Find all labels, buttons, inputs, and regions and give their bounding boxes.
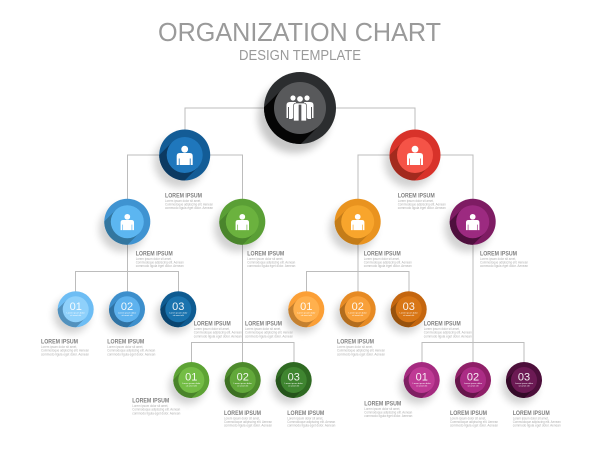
icon: person <box>407 146 423 165</box>
node: orange 03 <box>384 291 427 336</box>
text: orange 03: LOREM IPSUM <box>424 321 461 328</box>
node: purple 01: 01 <box>416 372 428 384</box>
node: orange 03: 03 <box>403 301 415 313</box>
node: green 01: 01 <box>185 372 197 384</box>
text: green lead: Commodoque adipiscing elit. Aenean <box>247 260 295 264</box>
text: light blue 01 <box>41 339 89 356</box>
text: green 01: LOREM IPSUM <box>132 398 170 405</box>
text: light blue 01: Commodoque adipiscing elit. Aenean <box>41 349 89 353</box>
text: green 02: LOREM IPSUM <box>224 410 261 417</box>
text: blue manager: Lorem ipsum dolor sit amet, <box>165 199 201 203</box>
text: orange lead: Commodoque adipiscing elit. Aenean <box>364 260 412 264</box>
text: green 03: Lorem ipsum dolor sit amet, <box>287 417 323 421</box>
text: green 03: Commodoque adipiscing elit. Aenean <box>287 420 335 424</box>
text: purple 03: Lorem ipsum dolor sit amet, <box>513 417 549 421</box>
text: orange lead: Lorem ipsum dolor sit amet, <box>364 257 400 261</box>
text: light blue 01: commodo ligula eget dolor. Aenean <box>41 352 89 356</box>
title: ORGANIZATION CHART <box>158 17 441 47</box>
connector lines <box>76 108 524 362</box>
node: purple 03: sit amet elit <box>518 385 530 388</box>
text: light blue 02: commodo ligula eget dolor. Aenean <box>107 352 155 356</box>
node: green 02: 02 <box>237 372 249 384</box>
text: purple lead: Lorem ipsum dolor sit amet, <box>480 257 516 261</box>
node: orange 01 <box>282 291 324 336</box>
node: purple lead <box>442 198 496 255</box>
text: light blue 03: commodo ligula eget dolor. Aenean <box>194 334 242 338</box>
text: green lead <box>247 250 295 268</box>
node: light blue 03: 03 <box>172 301 184 313</box>
text: light blue 02: Lorem ipsum dolor sit amet, <box>107 345 143 349</box>
text: orange lead: commodo ligula eget dolor. Aenean <box>364 264 412 268</box>
text: blue manager: commodo ligula eget dolor. Aenean <box>165 206 213 210</box>
node: green 03 <box>268 362 312 407</box>
text: red manager: commodo ligula eget dolor. Aenean <box>398 206 446 210</box>
node: orange 01: 01 <box>300 301 312 313</box>
text: light blue 01: Lorem ipsum dolor sit amet, <box>41 345 77 349</box>
icon: person <box>121 214 134 230</box>
text: green 02 <box>224 410 272 428</box>
text: purple 02: LOREM IPSUM <box>450 410 487 417</box>
text: purple 03 <box>513 410 561 428</box>
text: light blue lead: Lorem ipsum dolor sit amet, <box>136 257 172 261</box>
node: orange 02: sit amet elit <box>352 314 364 317</box>
text: light blue lead <box>136 250 184 268</box>
text: blue manager: LOREM IPSUM <box>165 192 202 199</box>
text: orange 03: Commodoque adipiscing elit. Aenean <box>424 331 472 335</box>
text: purple lead: LOREM IPSUM <box>480 250 517 257</box>
text: purple 01: commodo ligula eget dolor. Aenean <box>364 414 412 418</box>
text: purple 02 <box>450 410 498 428</box>
text: purple lead <box>480 250 528 268</box>
node: green 01 <box>166 362 210 407</box>
text: purple 03: Commodoque adipiscing elit. Aenean <box>513 420 561 424</box>
text: orange 03: commodo ligula eget dolor. Aenean <box>424 334 472 338</box>
node: green 02 <box>218 362 261 407</box>
node: green lead <box>211 198 266 255</box>
text: light blue 02: Commodoque adipiscing elit. Aenean <box>107 349 155 353</box>
text: red manager: Commodoque adipiscing elit. Aenean <box>398 202 446 206</box>
node: orange 02 <box>332 291 376 336</box>
text: green lead: commodo ligula eget dolor. Aenean <box>247 264 295 268</box>
node: orange 01: Lorem ipsum dolor <box>297 311 316 314</box>
text: green lead: Lorem ipsum dolor sit amet, <box>247 257 283 261</box>
node: green 03: sit amet elit <box>288 385 300 388</box>
node: light blue 03 <box>154 291 196 336</box>
text: orange lead: LOREM IPSUM <box>364 250 401 257</box>
text: orange 02: commodo ligula eget dolor. Aenean <box>337 352 385 356</box>
node: purple 03 <box>499 362 542 407</box>
node: purple 02: 02 <box>467 372 479 384</box>
icon: person <box>177 146 193 165</box>
node: orange 03: sit amet elit <box>403 314 415 317</box>
text: red manager: LOREM IPSUM <box>398 192 435 199</box>
node: light blue 03: Lorem ipsum dolor <box>169 311 188 314</box>
icon: team of people <box>286 95 314 121</box>
icon: person <box>236 214 249 230</box>
node: orange 02: Lorem ipsum dolor <box>349 311 367 314</box>
node: light blue lead <box>96 198 150 255</box>
text: purple 01 <box>364 400 412 418</box>
text: orange 02: Lorem ipsum dolor sit amet, <box>337 345 373 349</box>
text: green 01 <box>132 398 180 415</box>
text: light blue lead: LOREM IPSUM <box>136 250 173 257</box>
text: purple 02: commodo ligula eget dolor. Aenean <box>450 424 498 428</box>
node: orange 02: 02 <box>352 301 364 313</box>
text: green 02: commodo ligula eget dolor. Aenean <box>224 424 272 428</box>
text: purple 01: Lorem ipsum dolor sit amet, <box>364 407 400 411</box>
node: light blue 02: Lorem ipsum dolor <box>118 311 136 314</box>
text: blue manager <box>165 192 213 210</box>
icon: person <box>351 214 364 230</box>
text: light blue 03 <box>194 321 242 338</box>
node: orange 01: sit amet elit <box>301 314 312 317</box>
text: green 01: commodo ligula eget dolor. Aenean <box>132 411 180 415</box>
text: orange 02: LOREM IPSUM <box>337 339 374 346</box>
text: orange 02 <box>337 339 385 356</box>
text: light blue lead: commodo ligula eget dolor. Aenean <box>136 264 184 268</box>
text: purple 01: Commodoque adipiscing elit. Aenean <box>364 410 412 414</box>
text: green 02: Commodoque adipiscing elit. Aenean <box>224 420 272 424</box>
text: light blue lead: Commodoque adipiscing elit. Aenean <box>136 260 184 264</box>
text: purple lead: commodo ligula eget dolor. Aenean <box>480 264 528 268</box>
text: green lead: LOREM IPSUM <box>247 250 285 257</box>
text: green 03: LOREM IPSUM <box>287 410 325 417</box>
text: light blue 03: Commodoque adipiscing elit. Aenean <box>194 331 242 335</box>
node: light blue 03: sit amet elit <box>173 314 184 317</box>
node: purple 01: sit amet elit <box>416 385 428 388</box>
node: orange lead <box>326 198 381 255</box>
text: red manager: Lorem ipsum dolor sit amet, <box>398 199 434 203</box>
text: orange 01: LOREM IPSUM <box>245 321 282 328</box>
text: blue manager: Commodoque adipiscing elit. Aenean <box>165 202 213 206</box>
text: orange 03: Lorem ipsum dolor sit amet, <box>424 327 460 331</box>
text: purple 03: LOREM IPSUM <box>513 410 550 417</box>
node: light blue 01: sit amet elit <box>70 314 82 317</box>
text: green 01: Lorem ipsum dolor sit amet, <box>132 404 168 408</box>
node: green 03: Lorem ipsum dolor <box>285 382 303 385</box>
text: green 01: Commodoque adipiscing elit. Aenean <box>132 408 180 412</box>
text: red manager <box>398 192 446 210</box>
text: orange 01: Commodoque adipiscing elit. Aenean <box>245 331 293 335</box>
node: light blue 02: sit amet elit <box>121 314 133 317</box>
node: blue manager <box>151 130 210 190</box>
node: light blue 01: Lorem ipsum dolor <box>67 311 85 314</box>
node: purple 02: sit amet elit <box>467 385 479 388</box>
node: purple 01: Lorem ipsum dolor <box>413 382 431 385</box>
text: light blue 03: Lorem ipsum dolor sit amet, <box>194 327 230 331</box>
node: red manager <box>382 130 440 190</box>
text: light blue 03: LOREM IPSUM <box>194 321 231 328</box>
node: light blue 01: 01 <box>70 301 82 313</box>
text: purple 02: Lorem ipsum dolor sit amet, <box>450 417 486 421</box>
subtitle: DESIGN TEMPLATE <box>239 48 361 64</box>
node: purple 02: Lorem ipsum dolor <box>464 382 482 385</box>
text: orange 01 <box>245 321 293 338</box>
node: purple 01 <box>396 362 440 407</box>
node: purple 02 <box>448 362 491 407</box>
node: orange 03: Lorem ipsum dolor <box>400 311 418 314</box>
node: purple 03: 03 <box>518 372 530 384</box>
text: orange lead <box>364 250 412 268</box>
node: green 01: Lorem ipsum dolor <box>182 382 201 385</box>
text: orange 03 <box>424 321 472 338</box>
text: purple 03: commodo ligula eget dolor. Aenean <box>513 424 561 428</box>
node: green 01: sit amet elit <box>186 385 197 388</box>
text: purple lead: Commodoque adipiscing elit. Aenean <box>480 260 528 264</box>
text: purple 02: Commodoque adipiscing elit. Aenean <box>450 420 498 424</box>
node: light blue 02 <box>102 291 145 336</box>
node: top executive <box>254 72 336 156</box>
text: light blue 02: LOREM IPSUM <box>107 339 145 346</box>
icon: person <box>466 214 479 230</box>
text: orange 01: commodo ligula eget dolor. Aenean <box>245 334 293 338</box>
text: green 03: commodo ligula eget dolor. Aenean <box>287 424 335 428</box>
node: purple 03: Lorem ipsum dolor <box>515 382 533 385</box>
text: light blue 01: LOREM IPSUM <box>41 339 78 346</box>
text: green 02: Lorem ipsum dolor sit amet, <box>224 417 260 421</box>
text: purple 01: LOREM IPSUM <box>364 400 402 407</box>
text: orange 01: Lorem ipsum dolor sit amet, <box>245 327 281 331</box>
node: light blue 02: 02 <box>121 301 133 313</box>
node: green 03: 03 <box>288 372 300 384</box>
text: green 03 <box>287 410 335 428</box>
node: green 02: Lorem ipsum dolor <box>234 382 252 385</box>
node: green 02: sit amet elit <box>237 385 249 388</box>
node: light blue 01 <box>50 291 94 336</box>
text: orange 02: Commodoque adipiscing elit. Aenean <box>337 349 385 353</box>
text: light blue 02 <box>107 339 155 356</box>
